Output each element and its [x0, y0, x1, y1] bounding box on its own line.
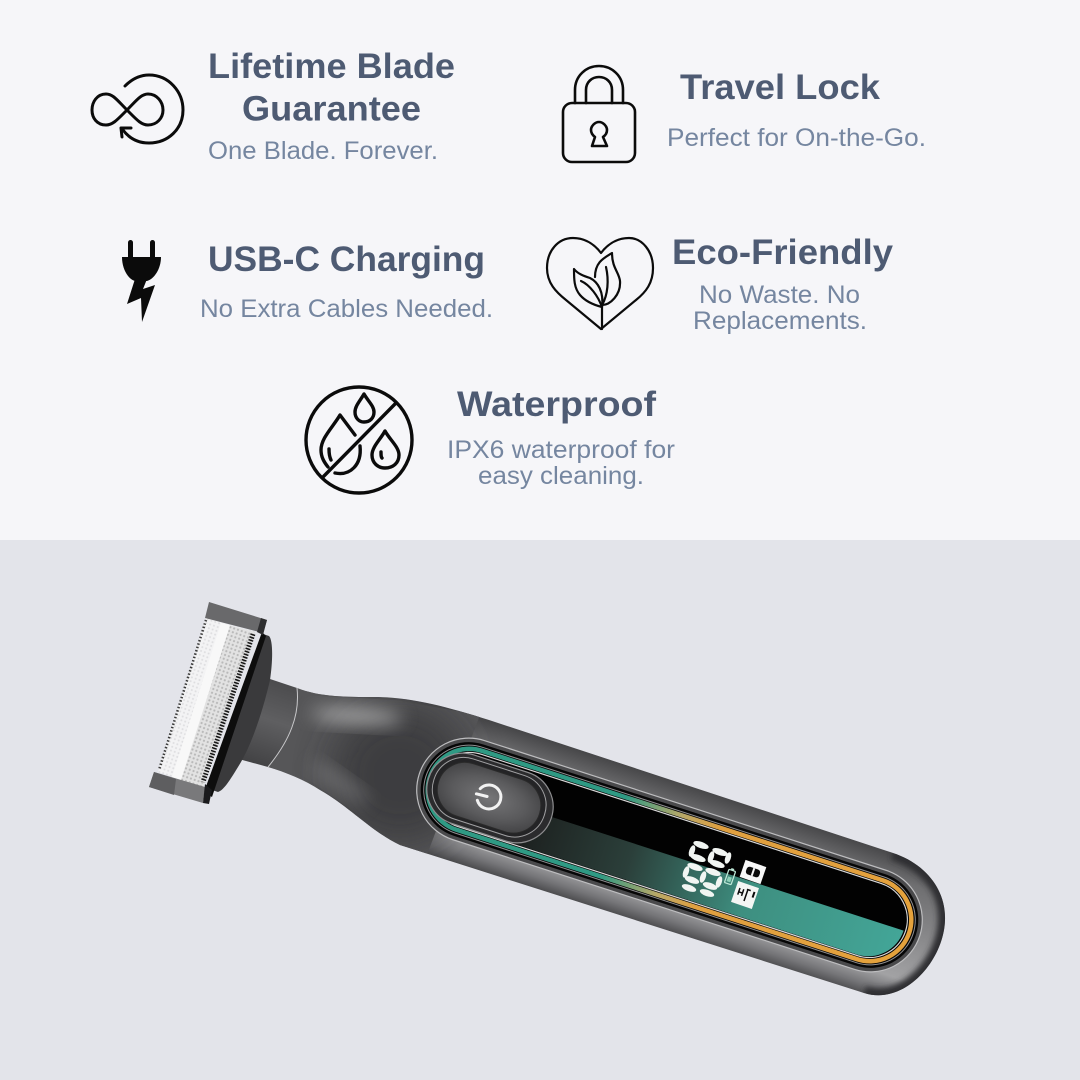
panel: product — [0, 540, 1080, 1080]
panel background: product — [0, 540, 1080, 1080]
feature: lifetime blade guarantee — [92, 47, 455, 165]
holder edge — [204, 632, 266, 797]
heading: travel lock: Travel Lock — [680, 68, 881, 107]
text: no extra cables needed: No Extra Cables Needed. — [200, 295, 493, 323]
trimmer handle — [260, 680, 945, 995]
text: perfect for on-the-go: Perfect for On-the-Go. — [667, 124, 926, 152]
heading: waterproof: Waterproof — [457, 385, 656, 424]
text: ipx6 waterproof: easy cleaning. — [478, 462, 644, 490]
bottom blade cap — [149, 772, 212, 804]
text: no waste no replacements — [693, 281, 867, 335]
control panel — [416, 738, 923, 972]
icon: lock indicator — [740, 860, 766, 884]
top blade cap — [205, 602, 267, 635]
icon: shower indicator — [731, 881, 759, 909]
feature: waterproof — [306, 385, 675, 493]
light line — [412, 733, 927, 977]
icon: plug with bolt — [122, 240, 161, 322]
heading: lifetime blade guarantee: Lifetime Blade — [208, 47, 455, 86]
panel outer black ring — [408, 730, 931, 980]
trimmer head holder — [212, 634, 272, 792]
power button — [418, 744, 562, 852]
panel bevel — [403, 725, 936, 985]
feature: travel lock — [563, 66, 926, 162]
feature: usb-c charging — [122, 240, 493, 323]
display window — [448, 752, 908, 958]
text: no waste no replacements: No Waste. No — [699, 281, 860, 309]
icon: battery — [724, 867, 736, 885]
icon: crossed water drops — [306, 387, 412, 493]
icon: infinity loop — [92, 75, 183, 143]
text: ipx6 waterproof: IPX6 waterproof for — [447, 436, 675, 464]
heading: usb-c charging: USB-C Charging — [208, 240, 485, 279]
panel: features — [0, 0, 1080, 540]
panel background: features — [0, 0, 1080, 540]
icon: padlock — [563, 66, 635, 162]
blade foil — [158, 618, 255, 787]
text: one blade forever: One Blade. Forever. — [208, 137, 438, 165]
text: no waste no replacements: Replacements. — [693, 307, 867, 335]
display digits — [681, 839, 733, 898]
icon: heart with leaves — [547, 238, 653, 329]
feature: eco-friendly — [547, 233, 894, 335]
heading: eco-friendly: Eco-Friendly — [672, 233, 894, 272]
icon: power symbol — [473, 782, 503, 812]
text: ipx6 waterproof — [447, 436, 675, 490]
product image: body trimmer — [149, 602, 945, 995]
heading: lifetime blade guarantee — [208, 47, 455, 128]
accent ring teal to orange — [417, 738, 922, 972]
trimmer neck — [235, 674, 298, 767]
heading: lifetime blade guarantee: Guarantee — [242, 90, 421, 128]
